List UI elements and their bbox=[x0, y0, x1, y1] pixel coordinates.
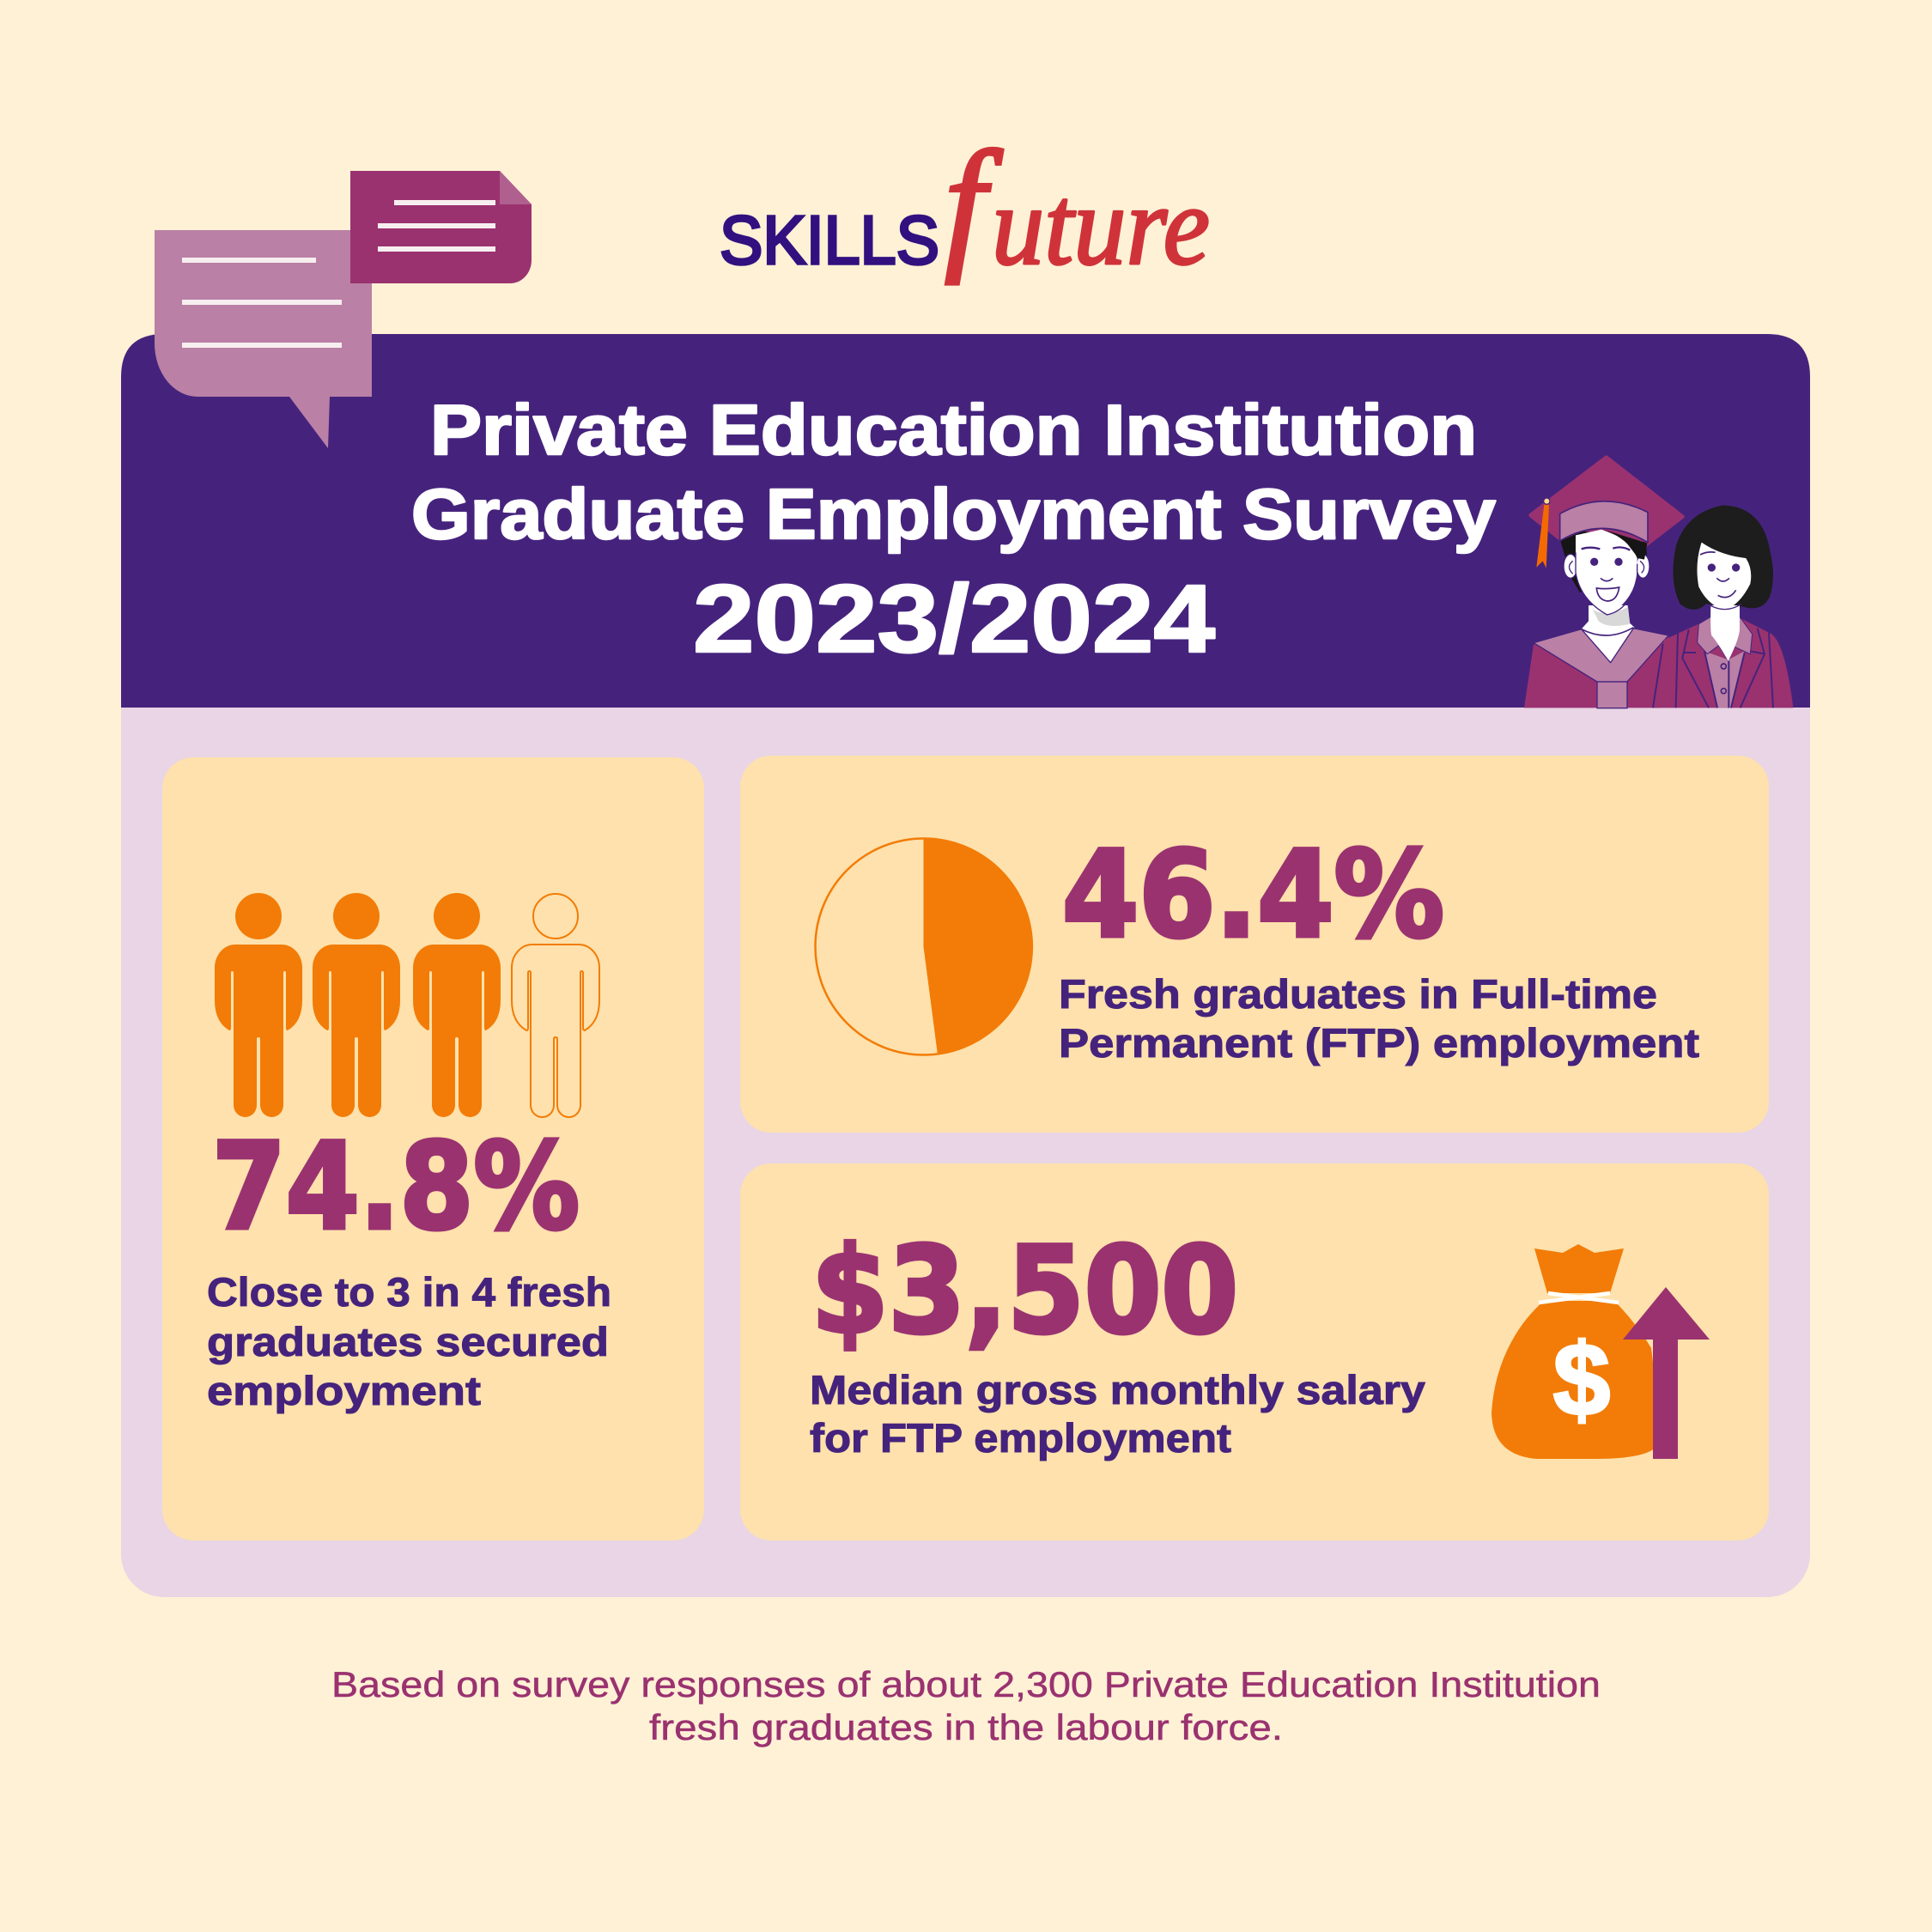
icon: document bubble bbox=[350, 171, 532, 283]
main panel bbox=[121, 334, 1810, 1597]
icon: large speech bubble bbox=[155, 230, 372, 448]
FTP description: Permanent (FTP) employment bbox=[1059, 1020, 1699, 1066]
footnote: Based on survey responses of about 2,300 Private Education Institution bbox=[331, 1664, 1601, 1704]
salary description bbox=[810, 1367, 1425, 1461]
title: 2023/2024 bbox=[693, 565, 1215, 672]
header band bbox=[121, 334, 1810, 708]
panel: employment rate bbox=[162, 757, 704, 1540]
male graduate bbox=[1524, 458, 1682, 708]
title: Private Education Institution bbox=[430, 390, 1477, 470]
stat: 46.4%: 46.4% bbox=[1062, 825, 1444, 964]
employment description bbox=[207, 1269, 611, 1413]
salary description: for FTP employment bbox=[810, 1415, 1231, 1461]
icon: chat bubbles bbox=[155, 171, 532, 448]
footnote: fresh graduates in the labour force. bbox=[649, 1707, 1283, 1747]
footnote bbox=[331, 1664, 1601, 1747]
employment description: employment bbox=[207, 1368, 481, 1413]
panel: median salary bbox=[740, 1163, 1769, 1540]
employment description: graduates secured bbox=[207, 1319, 609, 1364]
panel: full-time permanent employment bbox=[740, 756, 1769, 1133]
employment description: Close to 3 in 4 fresh bbox=[207, 1269, 611, 1315]
stat: 74.8%: 74.8% bbox=[212, 1117, 580, 1256]
icon: people pictogram bbox=[215, 893, 599, 1117]
logo: uture bbox=[992, 162, 1210, 289]
icon: money bag with arrow: $ bbox=[1553, 1322, 1610, 1437]
stat: $3,500: $3,500 bbox=[811, 1221, 1238, 1360]
title bbox=[411, 390, 1496, 672]
illustration: graduates bbox=[1524, 458, 1793, 708]
female graduate bbox=[1653, 505, 1793, 708]
FTP description bbox=[1059, 971, 1699, 1066]
logo bbox=[720, 122, 1210, 289]
title: Graduate Employment Survey bbox=[411, 474, 1496, 554]
icon: money bag with arrow bbox=[1492, 1244, 1710, 1459]
pie chart bbox=[816, 837, 1033, 1054]
logo: f bbox=[945, 122, 1003, 285]
salary description: Median gross monthly salary bbox=[810, 1367, 1425, 1413]
FTP description: Fresh graduates in Full-time bbox=[1059, 971, 1657, 1017]
logo: SKILLS bbox=[720, 202, 939, 278]
